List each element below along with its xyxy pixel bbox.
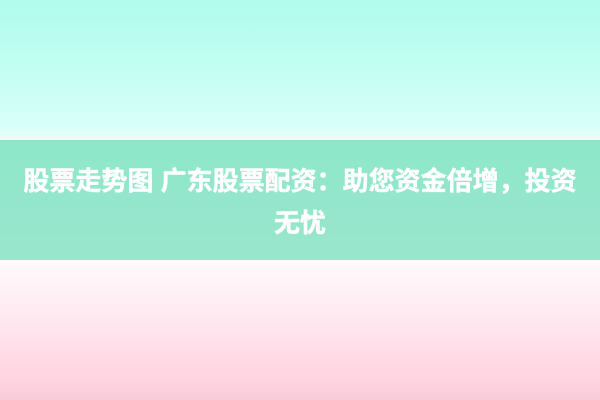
title [23,166,577,238]
title: 无忧 [274,208,326,238]
panel: central green band [0,140,600,260]
panel: top mint gradient [0,0,600,140]
panel: bottom pink gradient [0,260,600,400]
title: 股票走势图 广东股票配资：助您资金倍增，投资 [23,166,577,196]
